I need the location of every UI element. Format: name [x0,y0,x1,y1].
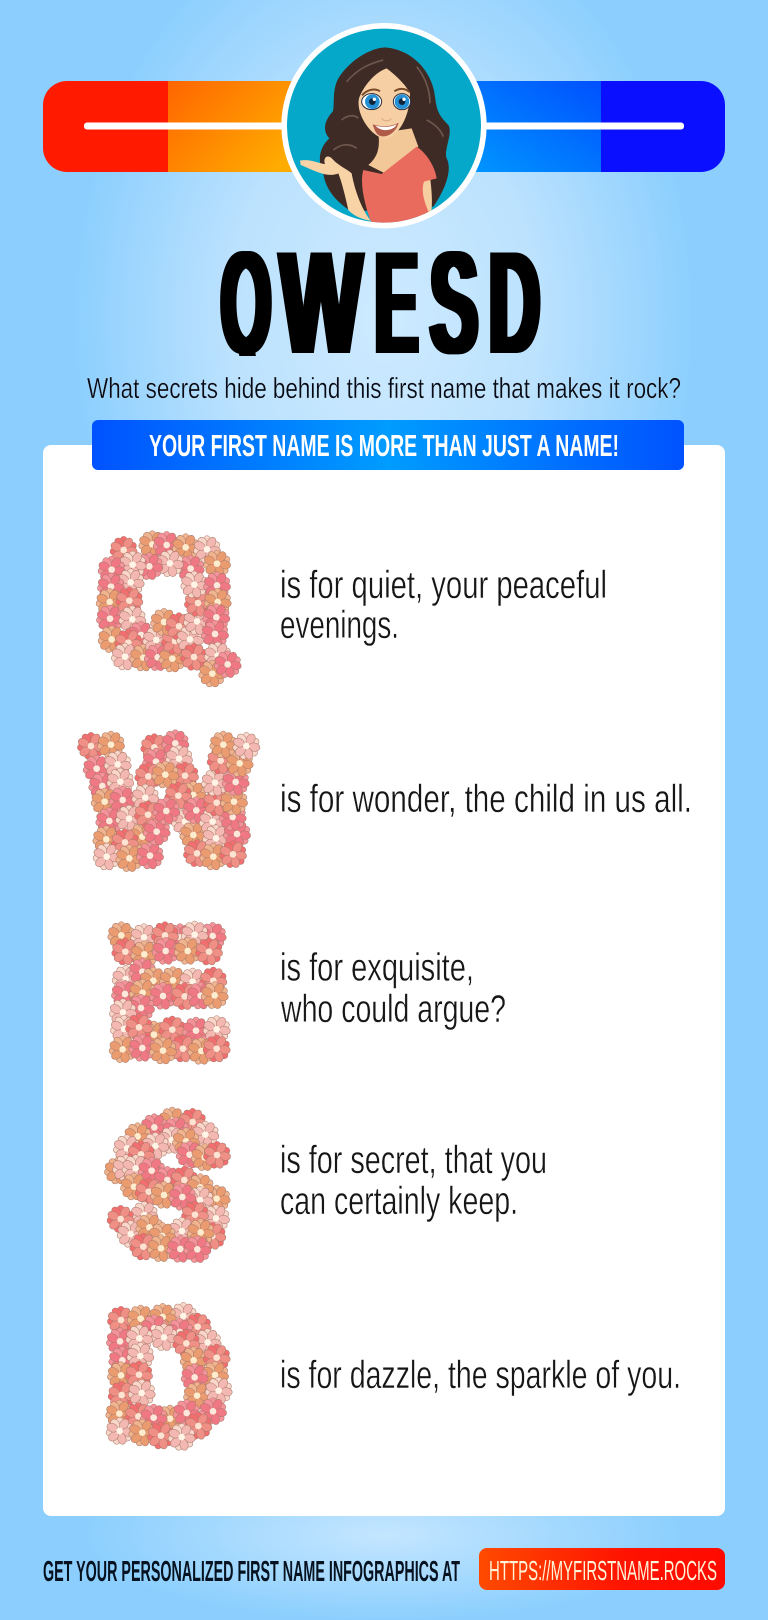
left arm and hand [300,157,371,221]
infographic page: D [489,221,540,384]
face [359,68,410,139]
white content panel [43,445,725,1516]
right arm [419,180,432,216]
title [220,251,541,356]
text: Q line: is for quiet, your peaceful [280,564,607,607]
eyes [362,94,382,110]
text: S line [280,1139,547,1223]
footer url button [479,1548,725,1590]
nose [382,118,391,121]
dress [362,147,437,224]
text: Q line: evenings. [280,604,399,647]
title: S [430,221,478,384]
title: W [280,221,362,384]
text: Q line [280,564,607,647]
neck [368,128,418,173]
text: E line: who could argue? [280,988,506,1031]
text: S line: can certainly keep. [280,1180,518,1223]
brows [362,89,409,95]
text: S line: is for secret, that you [280,1139,547,1182]
avatar portrait [281,23,487,228]
flower letter D [105,1302,233,1451]
flower letter W [77,730,260,873]
mouth [373,123,399,136]
title: Q [221,221,271,384]
flower letter Q [96,531,242,688]
header ribbon [43,81,725,172]
text: E line [280,946,506,1031]
hair [320,47,450,212]
flower letter E [107,921,231,1065]
title: E [375,221,418,384]
text: E line: is for exquisite, [280,946,474,990]
flower letter S [104,1107,231,1264]
blue banner [92,420,684,470]
